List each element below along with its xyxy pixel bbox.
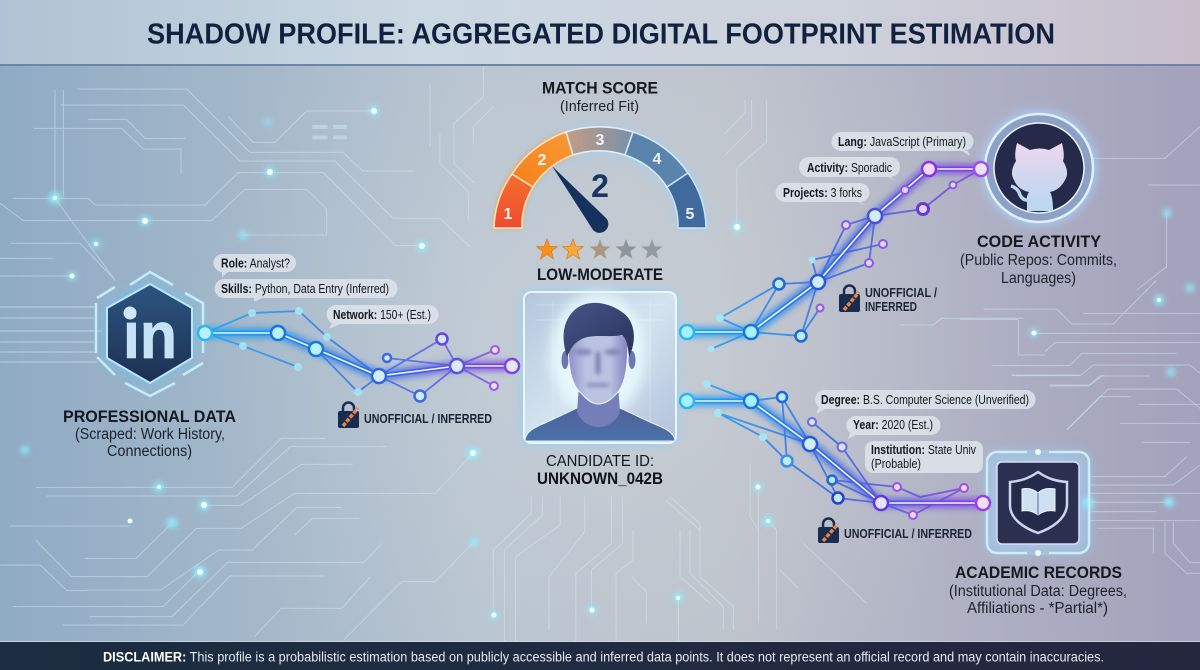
portrait ears [562, 351, 636, 369]
gauge scale numbers: 4 [653, 151, 662, 168]
academic source icon [987, 449, 1089, 556]
code activity label: (Public Repos: Commits, [960, 252, 1117, 269]
gauge [494, 127, 706, 233]
callout: projects: Projects: 3 forks [783, 186, 862, 200]
callout: projects [776, 183, 870, 206]
gauge needle [552, 166, 608, 233]
callout: year [846, 416, 940, 439]
icon: shield with book [1010, 472, 1067, 533]
academic records label: Affiliations - *Partial*) [967, 600, 1108, 617]
portrait hair [564, 303, 634, 357]
gauge segment 2 [512, 132, 573, 187]
callout: role: Role: Analyst? [221, 256, 290, 270]
unofficial lock badge: professional [338, 403, 492, 428]
unofficial lock badge: code [839, 285, 937, 314]
callout: institution: (Probable) [871, 457, 921, 471]
candidate id [537, 453, 663, 488]
callout: skills: Skills: Python, Data Entry (Inferred) [221, 282, 389, 296]
callout: degree [815, 390, 1036, 414]
academic records network [680, 380, 990, 519]
github source icon [983, 112, 1095, 224]
match score heading: (Inferred Fit) [560, 99, 639, 115]
candidate id: UNKNOWN_042B [537, 469, 663, 488]
callout: activity: Activity: Sporadic [807, 161, 892, 175]
professional data label: Connections) [107, 443, 192, 460]
callout: year: Year: 2020 (Est.) [853, 418, 933, 432]
gauge segment 3 [566, 127, 633, 155]
gauge scale numbers: 2 [538, 152, 547, 169]
gauge segment 5 [667, 173, 706, 228]
callout: degree: Degree: B.S. Computer Science (Unverified) [821, 393, 1029, 407]
gauge segment 4 [625, 132, 688, 187]
match score heading [542, 78, 658, 115]
linkedin source icon: in [123, 298, 177, 372]
icon: broken chain lock [818, 518, 839, 543]
portrait neck [577, 385, 620, 427]
callout: lang [832, 132, 974, 156]
code activity network [680, 162, 988, 352]
disclaimer footer [0, 641, 1200, 670]
callout: institution [865, 441, 983, 473]
portrait blurred eyes and nose [574, 349, 622, 385]
academic records label: (Institutional Data: Degrees, [949, 583, 1127, 600]
portrait shoulders [525, 408, 675, 441]
callout: skills [214, 279, 398, 302]
title bar [0, 0, 1200, 66]
match score heading: MATCH SCORE [542, 78, 658, 98]
unofficial lock badge: professional: UNOFFICIAL / INFERRED [364, 411, 492, 426]
gauge scale numbers: 5 [686, 206, 695, 223]
academic records label [949, 563, 1127, 617]
rating label: LOW-MODERATE [537, 265, 663, 284]
portrait face [568, 335, 628, 404]
unofficial lock badge: code: UNOFFICIAL / [865, 285, 937, 300]
gauge scale numbers: 3 [596, 132, 605, 149]
academic records label: ACADEMIC RECORDS [955, 563, 1122, 582]
gauge segment 1 [494, 174, 533, 228]
icon: octocat [1011, 143, 1067, 211]
callout: network [327, 305, 438, 329]
unofficial lock badge: academic [818, 518, 972, 543]
candidate id: CANDIDATE ID: [546, 453, 654, 470]
professional data network [198, 307, 519, 402]
professional data label [63, 407, 236, 460]
callout: network: Network: 150+ (Est.) [333, 308, 431, 322]
unofficial lock badge: academic: UNOFFICIAL / INFERRED [844, 526, 972, 541]
gauge scale numbers: 1 [504, 206, 513, 223]
unofficial lock badge: code: INFERRED [865, 299, 917, 314]
gauge score value: 2 [591, 168, 609, 204]
callout: lang: Lang: JavaScript (Primary) [838, 135, 966, 149]
linkedin source icon [96, 272, 203, 396]
gauge scale numbers [504, 132, 695, 223]
title bar: SHADOW PROFILE: AGGREGATED DIGITAL FOOTPRINT ESTIMATION [147, 18, 1055, 50]
professional data label: PROFESSIONAL DATA [63, 407, 236, 426]
callout: role [213, 254, 296, 277]
icon: broken chain lock [839, 286, 860, 312]
callout: institution: Institution: State Univ [871, 443, 977, 457]
code activity label: CODE ACTIVITY [977, 232, 1102, 251]
professional data label: (Scraped: Work History, [75, 426, 225, 443]
code activity label: Languages) [1001, 270, 1076, 287]
professional data callouts [213, 254, 438, 329]
star rating [536, 239, 662, 259]
candidate portrait [524, 292, 676, 443]
icon: broken chain lock [338, 403, 359, 428]
disclaimer footer: DISCLAIMER: This profile is a probabilistic estimation based on publicly accessible and inferred data points. It does not represent an official record and may contain inaccuracies. [103, 650, 1104, 664]
code activity label [960, 232, 1117, 287]
callout: activity [799, 157, 900, 181]
academic records callouts [815, 390, 1036, 473]
code activity callouts [776, 132, 974, 206]
